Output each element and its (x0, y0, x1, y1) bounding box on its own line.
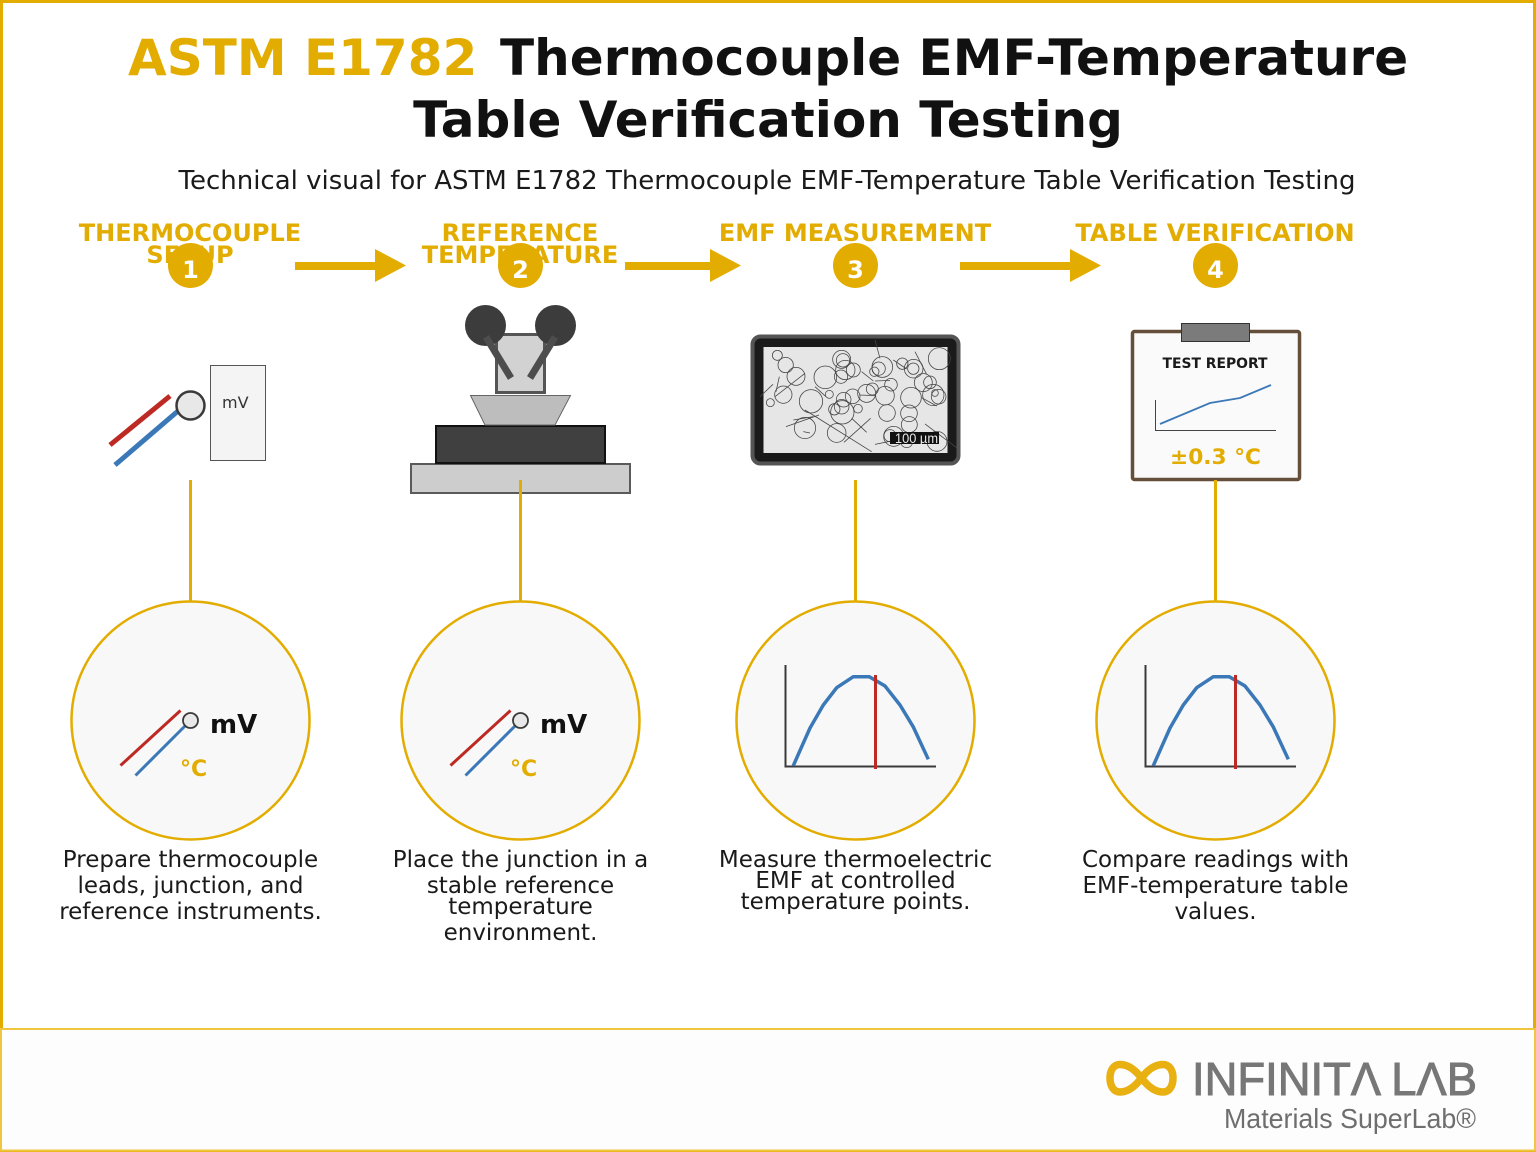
step 1 description: reference instruments. (59, 899, 322, 925)
circle 3: EMF curve chart (736, 602, 974, 840)
title: Thermocouple EMF-Temperature (500, 29, 1408, 87)
step 4 description: EMF-temperature table (1082, 873, 1349, 899)
step 2 badge (498, 243, 543, 288)
arrow 2 to 3 (625, 249, 741, 282)
step 4 description: Compare readings with (1082, 847, 1349, 873)
subtitle: Technical visual for ASTM E1782 Thermocouple EMF-Temperature Table Verification Testing (178, 166, 1355, 196)
step 2 label (422, 219, 618, 269)
step 2 description: stable reference (427, 873, 614, 899)
arrow 1 to 2 (295, 249, 406, 282)
connector 3 (854, 480, 857, 601)
step 4 description: values. (1174, 899, 1257, 925)
step 2 description: temperature (448, 894, 593, 920)
connector 4 (1214, 480, 1217, 601)
step 3 description (719, 847, 992, 915)
circle 1: thermocouple detail: °C (180, 757, 207, 782)
icon: microscope display: 100 µm (895, 431, 938, 446)
step 1 label: SETUP (146, 241, 234, 269)
title: ASTM E1782 (128, 29, 477, 87)
step 1 description (59, 847, 322, 925)
icon: test report clipboard: TEST REPORT (1162, 356, 1268, 372)
logo: Infinita Lab: INFINITΛ LΛB (1192, 1053, 1477, 1105)
arrow 3 to 4 (960, 249, 1101, 282)
icon: test report clipboard (1132, 324, 1300, 480)
step 2 label: REFERENCE (442, 219, 598, 247)
circle 1: thermocouple detail (72, 602, 310, 840)
title: Table Verification Testing (413, 91, 1123, 149)
step 1 label (79, 219, 301, 269)
circle 2: junction detail: mV (540, 710, 587, 740)
logo: Infinita Lab (1110, 1053, 1477, 1134)
connector 2 (519, 480, 522, 601)
step 2 description (393, 847, 648, 946)
step 2 description: environment. (444, 920, 597, 946)
step 3 label: EMF MEASUREMENT (719, 219, 992, 247)
step 2 description: Place the junction in a (393, 847, 648, 873)
icon: test report clipboard: ±0.3 °C (1170, 445, 1261, 470)
footer band (1, 1029, 1535, 1150)
step 4 label: TABLE VERIFICATION (1075, 219, 1355, 247)
step 1 label: THERMOCOUPLE (79, 219, 301, 247)
icon: reference temperature apparatus (411, 305, 630, 493)
logo: Infinita Lab: Materials SuperLab® (1224, 1103, 1476, 1134)
step 4 badge (1193, 243, 1238, 288)
circle 4: verification curve chart (1096, 602, 1334, 840)
step 1 description: Prepare thermocouple (63, 847, 318, 873)
icon: thermocouple with meter: mV (222, 393, 249, 412)
step 3 description: temperature points. (741, 889, 970, 915)
step 3 description: EMF at controlled (755, 868, 956, 894)
icon: thermocouple with meter (110, 366, 266, 465)
circle 1: thermocouple detail: mV (210, 710, 257, 740)
circle 2: junction detail (402, 602, 640, 840)
title (128, 29, 1408, 149)
step 3 description: Measure thermoelectric (719, 847, 992, 873)
step 2 label: TEMPERATURE (422, 241, 618, 269)
step 3 badge (833, 243, 878, 288)
step 1 badge (168, 243, 213, 288)
connector 1 (189, 480, 192, 601)
step 2 badge: 2 (512, 256, 529, 284)
step 1 description: leads, junction, and (78, 873, 303, 899)
step 1 badge: 1 (182, 256, 199, 284)
step 3 badge: 3 (847, 256, 864, 284)
step 4 description (1082, 847, 1349, 925)
step 4 badge: 4 (1207, 256, 1224, 284)
icon: microscope display (752, 336, 958, 464)
circle 2: junction detail: °C (510, 757, 537, 782)
